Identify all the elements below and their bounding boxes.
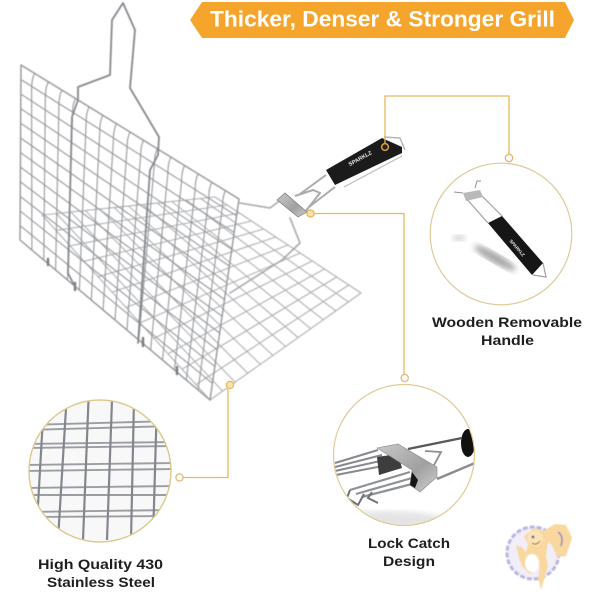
lock clamp xyxy=(277,193,307,217)
detail circle: handle: SPARKLZ xyxy=(508,238,526,258)
connector line xyxy=(385,96,509,154)
marker dot above circle xyxy=(505,154,513,162)
label: wooden removable handle xyxy=(432,314,582,348)
label: lock catch design: Design xyxy=(383,553,435,569)
tall hanger wire xyxy=(68,3,159,343)
main product: grill basket xyxy=(20,3,361,400)
handle tip wire xyxy=(384,137,405,150)
connecting wires to clamp xyxy=(230,202,300,293)
handle rods and loop xyxy=(295,175,335,212)
title banner: Thicker, Denser & Stronger Grill xyxy=(210,6,555,32)
callout: lock catch design xyxy=(307,210,475,569)
label: stainless steel xyxy=(38,556,163,590)
connector line xyxy=(183,389,228,478)
callout: stainless steel xyxy=(28,381,234,590)
detail circle: mesh close-up xyxy=(28,400,172,542)
detail circle: lock catch xyxy=(325,384,475,529)
marker dot on basket xyxy=(226,381,234,389)
floor mesh of the basket xyxy=(42,197,361,400)
marker dot on handle xyxy=(382,144,388,150)
label: lock catch design xyxy=(368,535,450,569)
brand name on grip: SPARKLZ xyxy=(348,150,374,168)
label: stainless steel: High Quality 430 xyxy=(38,556,163,572)
removable handle with clamp xyxy=(277,137,405,217)
detail circle: handle xyxy=(430,163,572,305)
label: stainless steel: Stainless Steel xyxy=(47,574,155,590)
icon: squirrel mascot badge xyxy=(507,524,572,590)
back mesh panel xyxy=(20,65,239,400)
connector line xyxy=(314,214,404,374)
marker dot on clamp xyxy=(307,210,314,217)
label: wooden removable handle: Wooden Removable xyxy=(432,314,582,330)
label: wooden removable handle: Handle xyxy=(481,332,534,348)
marker dot above circle xyxy=(401,374,408,382)
title banner xyxy=(190,2,574,38)
callout: wooden removable handle xyxy=(382,96,582,348)
label: lock catch design: Lock Catch xyxy=(368,535,450,551)
marker dot beside circle xyxy=(176,474,183,481)
grip underside stripe xyxy=(344,156,402,187)
black grip xyxy=(326,138,402,185)
